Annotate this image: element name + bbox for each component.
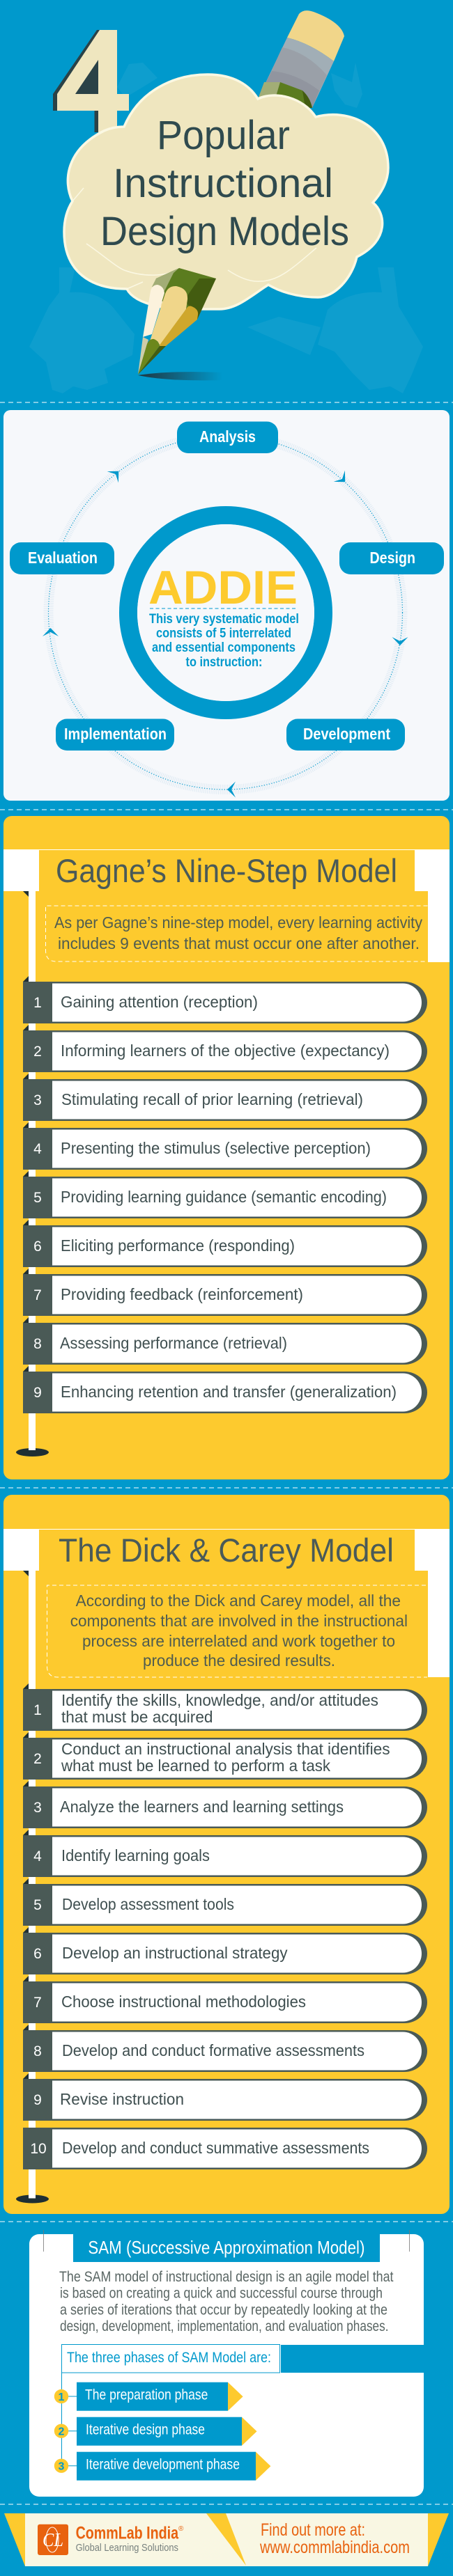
- step 7: [23, 1976, 427, 2023]
- step 9: Enhancing retention and transfer (generalization): [61, 1383, 397, 1401]
- description: [59, 2269, 394, 2334]
- phase 3: 3: [59, 2461, 65, 2473]
- description: a series of iterations that occur by repeatedly looking at the: [60, 2302, 387, 2318]
- phase 2: [54, 2417, 257, 2446]
- node: Analysis: [177, 422, 278, 453]
- intro text: According to the Dick and Carey model, all the: [76, 1592, 401, 1610]
- description: The SAM model of instructional design is an agile model that: [59, 2269, 394, 2285]
- step 8: 8: [33, 1336, 42, 1352]
- step 4: Presenting the stimulus (selective perception): [61, 1139, 371, 1157]
- step 2: what must be learned to perform a task: [61, 1757, 330, 1775]
- brand name: ®: [178, 2525, 184, 2533]
- step 7: [23, 1269, 427, 1316]
- call to action: Find out more at:: [261, 2520, 365, 2540]
- call to action: www.commlabindia.com: [259, 2538, 410, 2557]
- step 2: Conduct an instructional analysis that identifies: [61, 1740, 390, 1758]
- step 6: Eliciting performance (responding): [61, 1236, 295, 1255]
- panel: SAM: [29, 2230, 424, 2497]
- step 2: 2: [33, 1044, 42, 1060]
- panel: The Dick & Carey Model: [3, 1495, 450, 2214]
- step 2: 2: [33, 1751, 42, 1767]
- center text: This very systematic model: [149, 612, 299, 627]
- phase 3: [54, 2452, 270, 2481]
- node: Implementation: [56, 718, 174, 751]
- step 5: Develop assessment tools: [62, 1895, 234, 1913]
- step 8: Assessing performance (retrieval): [60, 1334, 287, 1352]
- panel: Gagne's Nine-Step Model: [3, 816, 450, 1479]
- heading: Gagne’s Nine-Step Model: [56, 852, 397, 889]
- node: Analysis: Analysis: [199, 427, 256, 446]
- step 6: 6: [33, 1946, 42, 1962]
- node: Implementation: Implementation: [64, 725, 167, 743]
- flag pole: [16, 891, 49, 1456]
- step 10: 10: [30, 2141, 47, 2157]
- logo: [38, 2524, 68, 2555]
- phase 1: [54, 2382, 243, 2411]
- intro text: includes 9 events that must occur one after another.: [58, 934, 420, 952]
- step 9: [23, 2073, 427, 2121]
- node: Evaluation: [10, 542, 114, 574]
- node: Evaluation: Evaluation: [28, 549, 98, 567]
- center text: [148, 561, 299, 670]
- step 8: 8: [33, 2043, 42, 2059]
- step 6: [23, 1927, 427, 1974]
- node: Design: Design: [369, 549, 415, 567]
- intro text: components that are involved in the instructional: [70, 1612, 408, 1630]
- footer: [4, 2513, 449, 2566]
- step 2: [23, 1732, 427, 1780]
- center text: consists of 5 interrelated: [156, 627, 291, 641]
- intro text: process are interrelated and work together to: [82, 1632, 395, 1650]
- header section: [29, 10, 423, 393]
- node: Design: [339, 542, 444, 574]
- phase 1: The preparation phase: [85, 2387, 208, 2403]
- step 2: Informing learners of the objective (expectancy): [61, 1042, 390, 1060]
- center text: and essential components: [152, 641, 295, 655]
- arrow: analysis to design: [334, 471, 351, 487]
- arrow: development to implementation: [227, 781, 236, 798]
- title text: Popular: [157, 113, 290, 158]
- title cloud: [64, 74, 388, 309]
- step 1: 1: [33, 1702, 42, 1718]
- step 7: Choose instructional methodologies: [61, 1993, 306, 2011]
- center ring: [128, 515, 323, 710]
- phase 1: 1: [59, 2392, 65, 2403]
- logo: CL: [43, 2529, 63, 2550]
- step 5: 5: [33, 1190, 42, 1206]
- arrow: evaluation to analysis: [107, 466, 124, 482]
- phase 2: 2: [59, 2426, 65, 2438]
- step 3: 3: [33, 1800, 42, 1816]
- phase 3: Iterative development phase: [86, 2457, 240, 2473]
- numeral 4: [53, 30, 129, 132]
- step 8: [23, 1317, 427, 1365]
- intro text: [47, 1585, 427, 1677]
- step 3: Analyze the learners and learning settings: [60, 1798, 344, 1816]
- step 1: 1: [33, 995, 42, 1011]
- step 9: 9: [33, 2092, 42, 2108]
- arrow: design to development: [392, 637, 408, 645]
- step 4: 4: [33, 1141, 42, 1157]
- step 8: Develop and conduct formative assessments: [62, 2041, 364, 2059]
- title text: [100, 113, 349, 254]
- step 1: [23, 1683, 427, 1731]
- step 5: 5: [33, 1897, 42, 1913]
- node: Development: [286, 718, 405, 751]
- title text: Instructional: [113, 161, 333, 206]
- description: design, development, implementation, and evaluation phases.: [60, 2318, 389, 2334]
- step 6: Develop an instructional strategy: [62, 1944, 288, 1962]
- phase 2: Iterative design phase: [86, 2422, 205, 2438]
- step 6: 6: [33, 1239, 42, 1255]
- phases heading: [61, 2345, 424, 2373]
- phases heading: The three phases of SAM Model are:: [67, 2350, 271, 2366]
- step 2: [23, 1025, 427, 1072]
- heading: The Dick & Carey Model: [59, 1532, 394, 1569]
- pencil top: eraser and ferrule: [257, 10, 344, 108]
- step 3: [23, 1781, 427, 1828]
- step 1: Identify the skills, knowledge, and/or attitudes: [61, 1691, 378, 1709]
- step 1: Gaining attention (reception): [61, 993, 258, 1011]
- step 8: [23, 2025, 427, 2072]
- intro text: [46, 906, 428, 961]
- arrow: implementation to evaluation: [43, 628, 59, 636]
- center text: ADDIE: [148, 561, 298, 614]
- step 4: [23, 1830, 427, 1877]
- step 3: 3: [33, 1092, 42, 1108]
- step 7: Providing feedback (reinforcement): [61, 1285, 303, 1303]
- brand name: Global Learning Solutions: [76, 2542, 178, 2554]
- brand name: CommLab India: [76, 2524, 179, 2543]
- flag pole: [16, 1571, 49, 2203]
- step 10: [23, 2128, 427, 2169]
- intro text: produce the desired results.: [143, 1651, 335, 1670]
- step 10: Develop and conduct summative assessments: [62, 2139, 369, 2157]
- step 5: [23, 1878, 427, 1926]
- brand name: [76, 2524, 184, 2554]
- step 1: [23, 976, 427, 1023]
- step 9: Revise instruction: [60, 2090, 184, 2108]
- step 6: [23, 1220, 427, 1267]
- description: is based on creating a quick and successful course through: [60, 2286, 383, 2302]
- cycle ring: [49, 436, 403, 790]
- step 5: [23, 1171, 427, 1218]
- heading: SAM (Successive Approximation Model): [88, 2237, 364, 2258]
- step 9: 9: [33, 1385, 42, 1401]
- step 3: Stimulating recall of prior learning (retrieval): [61, 1090, 363, 1108]
- step 4: Identify learning goals: [61, 1846, 210, 1864]
- step 9: [23, 1366, 427, 1413]
- intro text: As per Gagne’s nine-step model, every learning activity: [54, 913, 422, 932]
- step 4: 4: [33, 1848, 42, 1864]
- ghost hand illustrations: [29, 63, 423, 393]
- pencil tip: [138, 268, 222, 380]
- heading: [73, 2234, 380, 2262]
- step 4: [23, 1122, 427, 1170]
- center text: to instruction:: [185, 655, 262, 670]
- step 7: 7: [33, 1287, 42, 1303]
- call to action: [259, 2520, 410, 2557]
- node: Development: Development: [303, 725, 390, 743]
- step 1: that must be acquired: [61, 1708, 213, 1726]
- step 5: Providing learning guidance (semantic encoding): [61, 1188, 387, 1206]
- step 7: 7: [33, 1995, 42, 2011]
- step 3: [23, 1074, 427, 1121]
- panel: ADDIE: [3, 410, 450, 801]
- title text: Design Models: [100, 209, 349, 254]
